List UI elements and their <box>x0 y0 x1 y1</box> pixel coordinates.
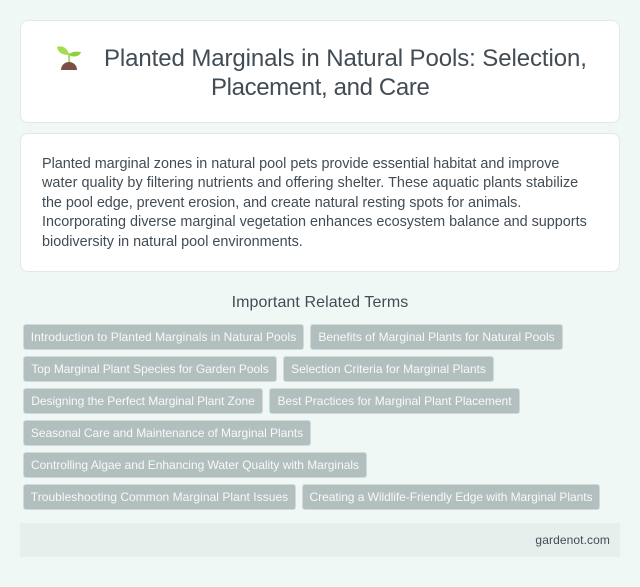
tag <box>310 324 563 350</box>
intro paragraph: Planted marginal zones in natural pool pets provide essential habitat and improve <box>42 156 559 172</box>
tag <box>23 452 367 478</box>
footer bar <box>20 523 620 557</box>
tag: Introduction to Planted Marginals in Natural Pools <box>31 330 296 344</box>
tag list <box>23 324 600 510</box>
tag <box>23 420 311 446</box>
panel: title header: Planted Marginals in Natural Pools: Selection, <box>104 45 587 72</box>
intro paragraph <box>42 156 587 250</box>
tag: Controlling Algae and Enhancing Water Quality with Marginals <box>31 458 359 472</box>
tag <box>283 356 494 382</box>
tag <box>269 388 520 414</box>
tag: Best Practices for Marginal Plant Placement <box>277 394 512 408</box>
tag: Creating a Wildlife-Friendly Edge with Marginal Plants <box>310 490 592 504</box>
intro paragraph: Incorporating diverse marginal vegetation enhances ecosystem balance and supports <box>42 214 587 230</box>
tag <box>23 388 263 414</box>
intro paragraph: water quality by filtering nutrients and offering shelter. These aquatic plants stabilize <box>42 175 578 191</box>
panel: title header <box>20 20 620 123</box>
intro paragraph: the pool edge, prevent erosion, and create natural resting spots for animals. <box>42 194 521 210</box>
intro paragraph: biodiversity in natural pool environments. <box>42 234 303 250</box>
heading: related terms: Important Related Terms <box>232 294 408 311</box>
tag: Top Marginal Plant Species for Garden Pools <box>31 362 269 376</box>
tag: Seasonal Care and Maintenance of Marginal Plants <box>31 426 303 440</box>
tag: Troubleshooting Common Marginal Plant Issues <box>31 490 288 504</box>
panel: intro text <box>20 133 620 272</box>
title <box>104 45 587 101</box>
tag: Benefits of Marginal Plants for Natural Pools <box>318 330 555 344</box>
tag <box>23 356 277 382</box>
tag: Selection Criteria for Marginal Plants <box>291 362 486 376</box>
footer source: gardenot.com <box>535 533 610 547</box>
icon: seedling <box>57 46 81 70</box>
tag <box>302 484 600 510</box>
tag: Designing the Perfect Marginal Plant Zone <box>31 394 255 408</box>
panel: title header: Placement, and Care <box>211 74 429 101</box>
tag <box>23 324 304 350</box>
tag <box>23 484 296 510</box>
